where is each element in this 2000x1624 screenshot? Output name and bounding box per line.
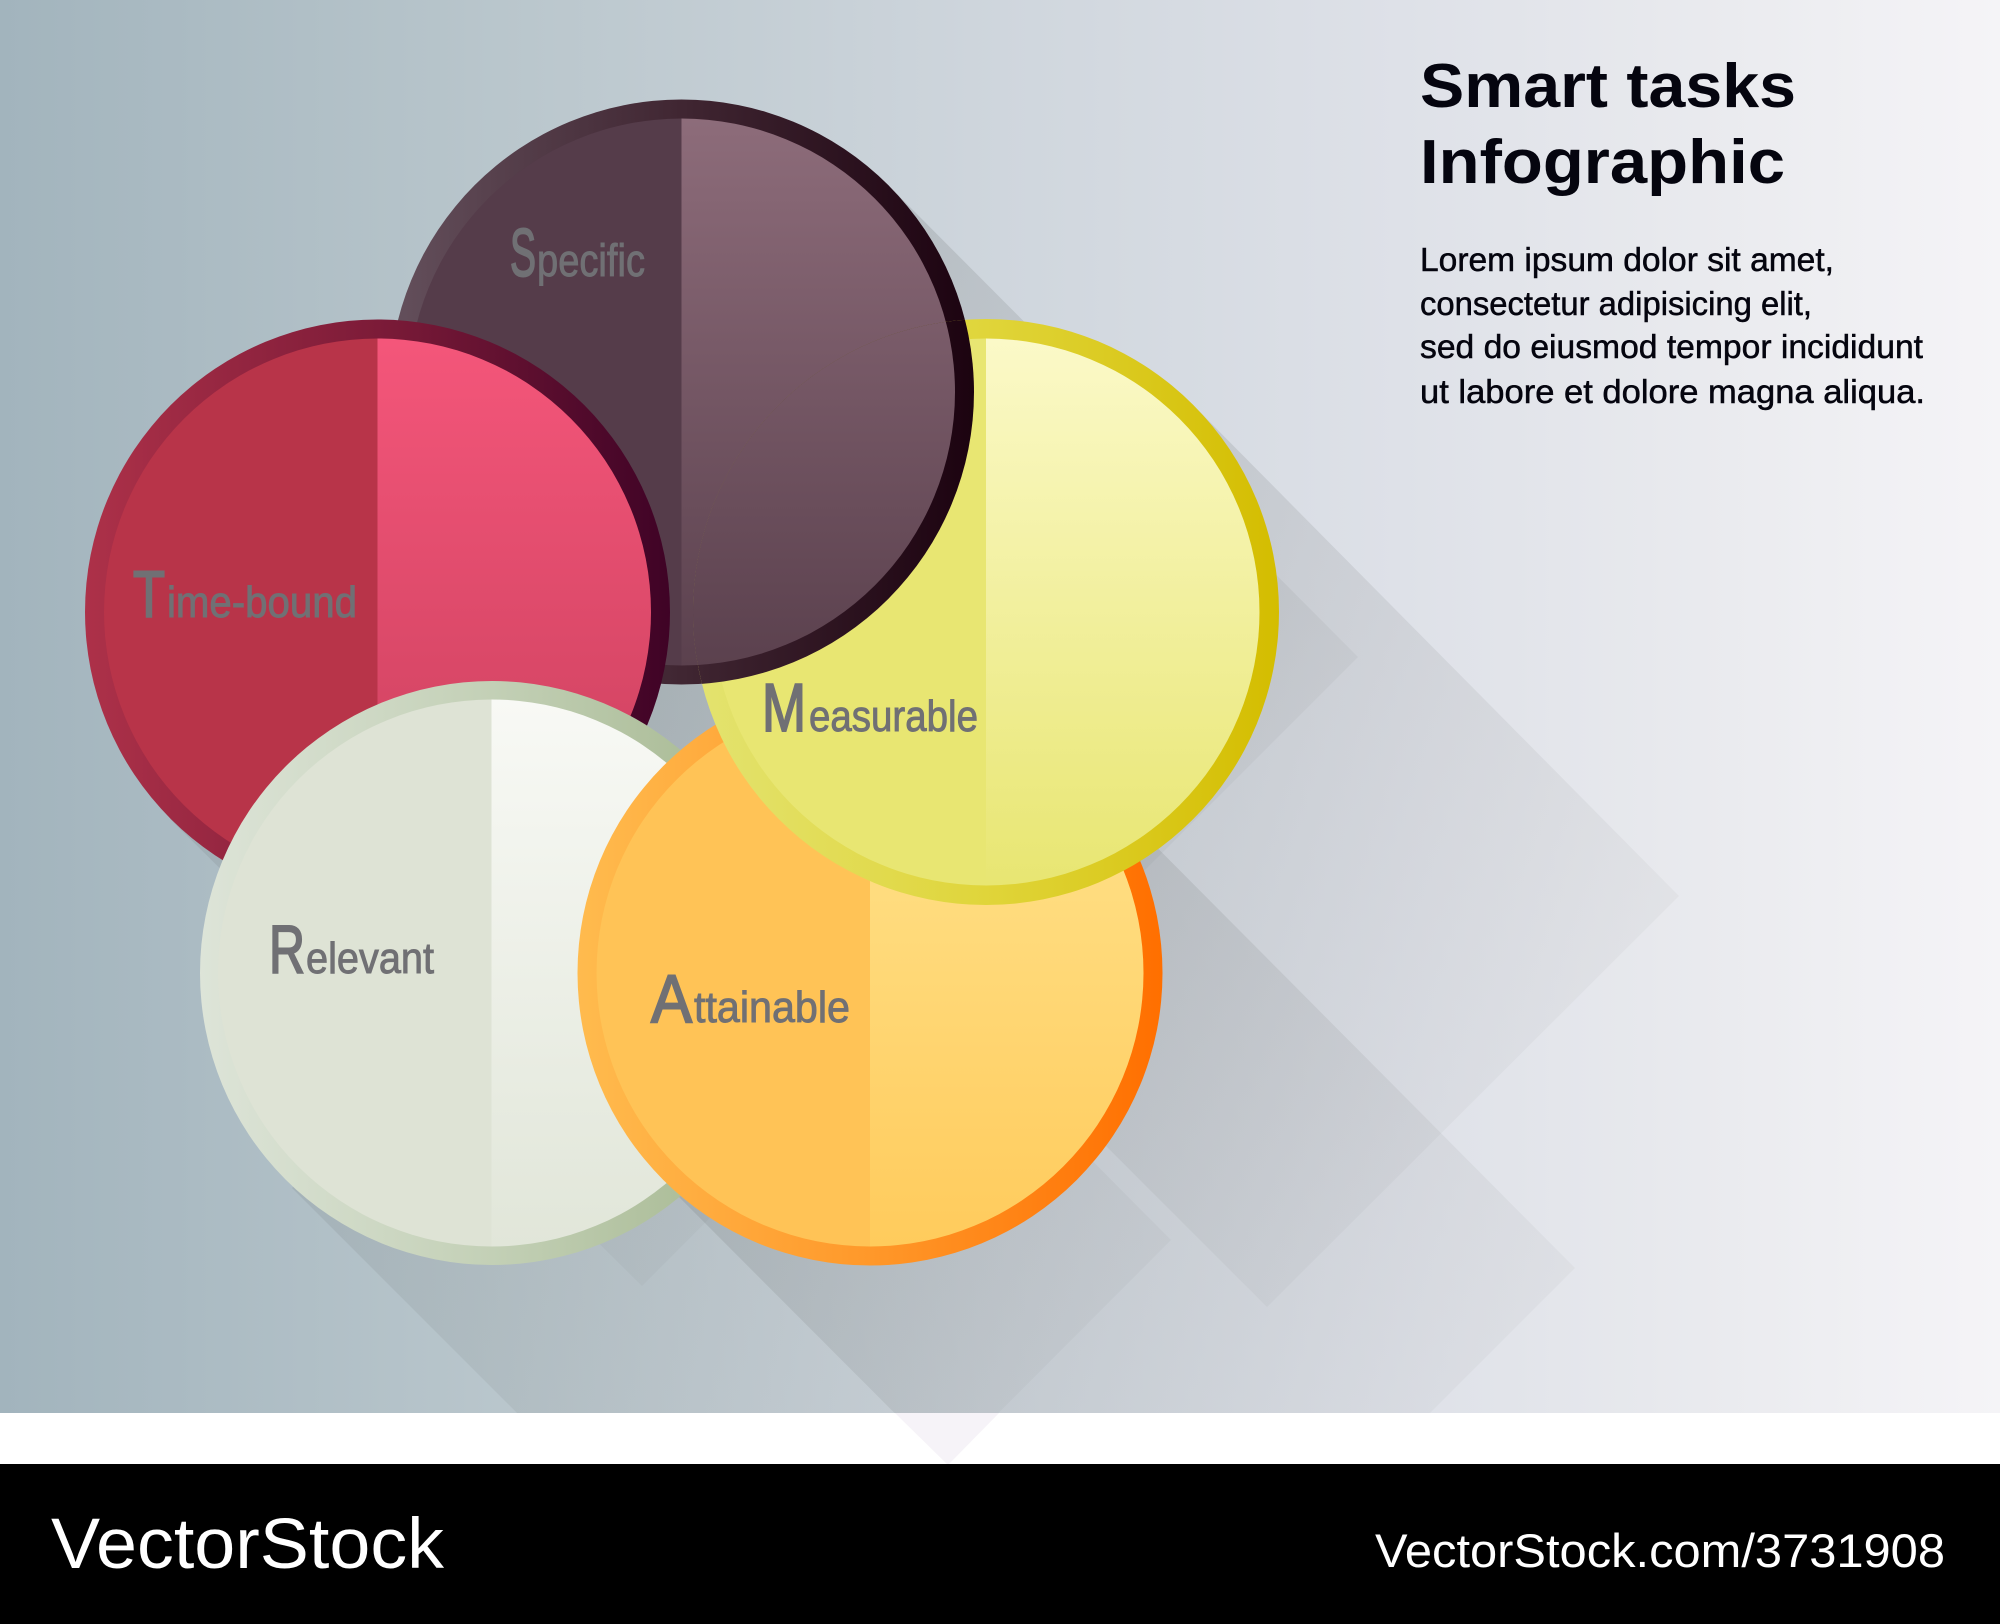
label: time-bound: T [133,557,165,631]
body text: ut labore et dolore magna aliqua. [1420,373,1925,410]
label: attainable: ttainable [694,983,850,1032]
panel: specific [389,100,974,684]
label: attainable: A [651,961,693,1037]
panel: time-bound [85,320,670,904]
label: specific: pecific [537,235,645,286]
body text: consectetur adipisicing elit, [1420,285,1812,322]
label: specific: S [510,215,536,291]
label: relevant: R [269,912,305,988]
panel: measurable [693,319,1279,905]
long shadows [170,192,1644,1413]
title: Infographic [1420,128,1785,197]
body text: Lorem ipsum dolor sit amet, [1420,241,1834,278]
footer logo: VectorStock [51,1505,445,1584]
footer url: VectorStock.com/3731908 [1375,1524,1945,1577]
body text: sed do eiusmod tempor incididunt [1420,328,1923,365]
panel: attainable [578,680,1162,1266]
label: measurable: easurable [809,692,978,741]
panel: relevant [200,681,784,1265]
footer bar [0,1464,2000,1624]
label: measurable: M [762,670,806,746]
shadow tip below the panel [895,1413,999,1465]
title: Smart tasks [1420,52,1796,121]
specific disc overlapping measurable [693,320,974,684]
label: relevant: elevant [306,934,434,983]
label: time-bound: ime-bound [167,578,357,627]
